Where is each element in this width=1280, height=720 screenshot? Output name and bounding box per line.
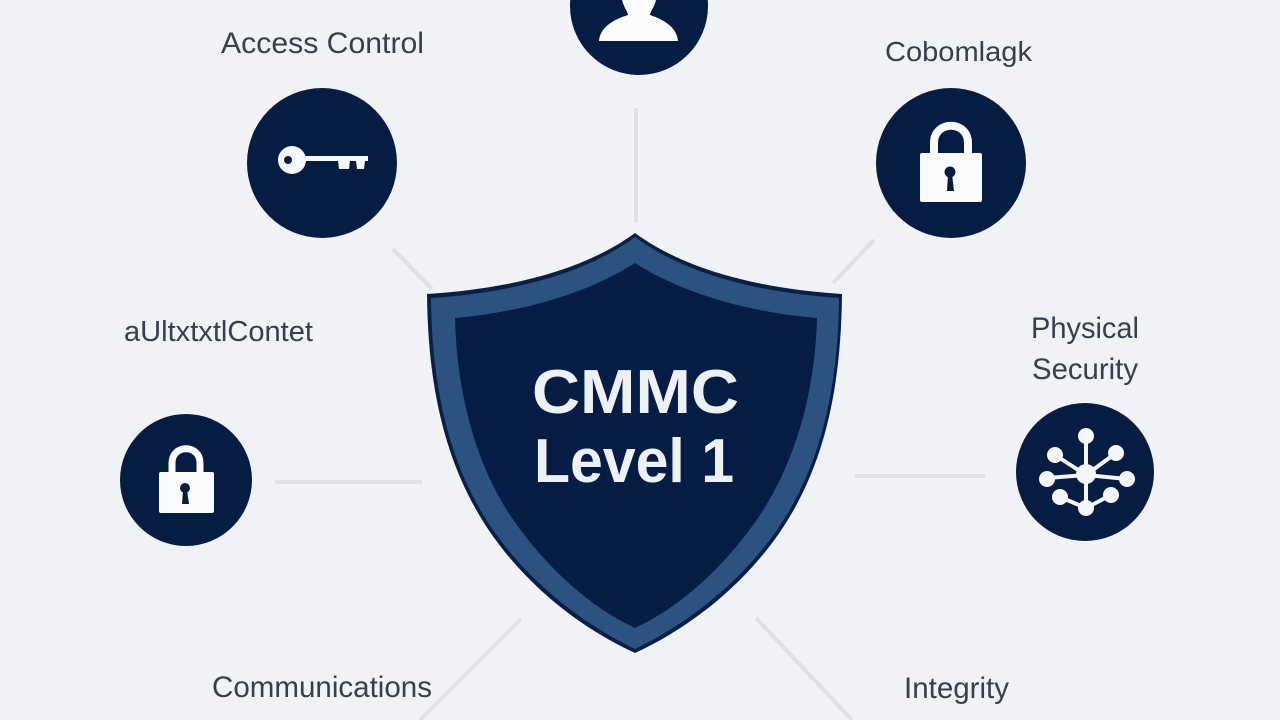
connector: left xyxy=(275,480,422,484)
connector: right xyxy=(855,474,985,478)
node: top person xyxy=(570,0,708,75)
icon: padlock xyxy=(920,126,982,202)
label: access control: Access Control xyxy=(221,27,424,60)
icon: network xyxy=(1039,428,1135,516)
icon: person xyxy=(599,0,678,41)
label: top right: Cobomlagk xyxy=(885,36,1033,67)
connector: lower left xyxy=(420,619,521,720)
shield title: CMMC xyxy=(532,358,739,427)
central shield xyxy=(427,233,842,653)
icon: padlock xyxy=(159,449,214,513)
shield title: Level 1 xyxy=(534,427,734,496)
node: network xyxy=(1016,403,1154,541)
node: lock right xyxy=(876,88,1026,238)
connector: top xyxy=(634,108,638,222)
label: physical security: Security xyxy=(1032,353,1138,386)
connector: upper right xyxy=(833,240,874,283)
node: key xyxy=(247,88,397,238)
icon: key xyxy=(278,146,368,174)
connector: lower right xyxy=(756,618,852,720)
label: communications: Communications xyxy=(212,671,432,704)
label: physical security xyxy=(1031,312,1139,386)
node: lock left xyxy=(120,414,252,546)
label: integrity: Integrity xyxy=(904,672,1009,705)
label: physical security: Physical xyxy=(1031,312,1139,345)
label: left: aUltxtxtlContet xyxy=(124,316,313,348)
shield title xyxy=(532,358,739,496)
connector: upper left xyxy=(393,249,432,289)
